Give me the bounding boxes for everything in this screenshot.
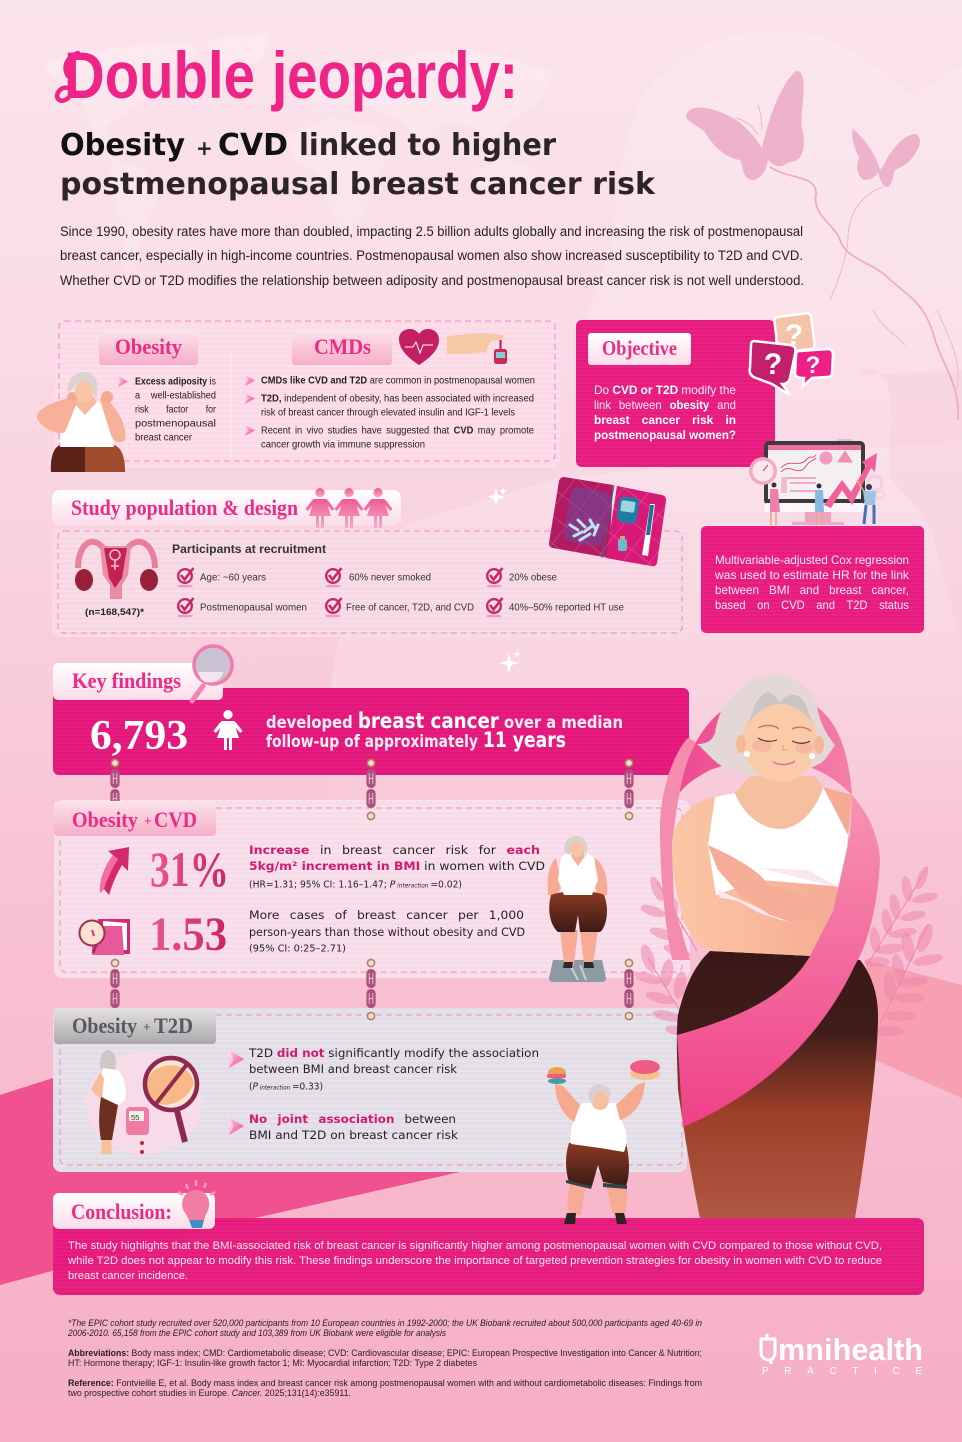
icon: question bubbles: ? (806, 352, 820, 379)
icon: light bulb (178, 1180, 215, 1228)
heading: key findings (53, 663, 223, 700)
heading: CMDs (292, 329, 392, 365)
heading: CMDs: CMDs (314, 334, 371, 359)
stat: 1.53: 1.53 (149, 908, 227, 961)
CVD text: increase: 5kg/m² increment in BMI in women with CVD (249, 859, 545, 873)
CVD text: more cases (249, 908, 525, 954)
subtitle: linked to higher (299, 128, 556, 163)
icon: rising arrow (100, 847, 129, 895)
icon: magnifying glass (192, 646, 232, 701)
CVD text: increase: (HR=1.31; 95% CI: 1.16–1.47; P interaction =0.02) (249, 880, 462, 890)
participant checklist: 20% obese (509, 572, 557, 584)
stat: 6,793: 6,793 (90, 713, 188, 759)
subtitle: CVD (218, 128, 288, 163)
heading: conclusion (53, 1193, 215, 1229)
panel: methods: was used to estimate HR for the link (714, 568, 910, 582)
participant checklist: Postmenopausal women (200, 602, 307, 614)
participant checklist: Free of cancer, T2D, and CVD (346, 602, 474, 614)
icon: question bubbles: ? (764, 348, 782, 381)
participants heading: Participants at recruitment (172, 544, 326, 556)
obesity text: Excess adiposity is (135, 376, 216, 388)
butterflies and stems (686, 71, 958, 420)
CVD text: increase: Increase in breast cancer risk for each (249, 843, 540, 857)
heading: Obesity: Obesity (115, 334, 182, 359)
obesity text (118, 376, 217, 444)
icon: heart (399, 329, 439, 365)
ribbon back loop (678, 707, 852, 795)
intro paragraph: Whether CVD or T2D modifies the relationship between adiposity and postmenopausal breast cancer risk is not well understood. (60, 273, 804, 288)
right ribbon and sash (677, 795, 880, 1127)
illustration: monitor and analysts (749, 440, 884, 525)
obesity text: a well-established (135, 390, 216, 402)
objective text: link between obesity and (594, 398, 736, 412)
neck (735, 776, 823, 829)
heading: obesity plus CVD: + (144, 813, 152, 828)
tank top (708, 787, 848, 895)
key finding text: follow-up of approximately 11 years (266, 728, 566, 752)
illustration: main woman with pink ribbon (660, 675, 880, 1218)
intro paragraph: Since 1990, obesity rates have more than doubled, impacting 2.5 billion adults globally and increasing the risk of postmenopausal (60, 224, 803, 239)
subtitle: postmenopausal breast cancer risk (60, 167, 656, 202)
objective text (594, 383, 736, 442)
panel: obesity and CMDs (37, 317, 560, 472)
panel: methods: based on CVD and T2D status (715, 598, 909, 612)
heading: key findings: Key findings (72, 668, 181, 693)
heading: study population and design: Study population & design (71, 495, 298, 520)
obesity text: breast cancer (135, 432, 193, 444)
icon: uterus (75, 542, 158, 599)
CVD text: more cases: (95% CI: 0:25–2.71) (249, 944, 346, 954)
title: Double (64, 38, 255, 112)
face (743, 704, 817, 782)
conclusion text (67, 1240, 882, 1282)
heading: Objective: Objective (602, 336, 677, 360)
footnotes: HT: Hormone therapy; IGF-1: Insulin-like growth factor 1; MI: Myocardial infarction; T2D: Type 2 diabetes (68, 1358, 477, 1369)
sample size: (n=168,547)* (85, 607, 145, 617)
torso and arms (672, 787, 865, 956)
stat: 31%: 31% (150, 841, 229, 897)
CMDs text: cancer growth via immune suppression (261, 440, 425, 450)
conclusion text: while T2D does not appear to modify this risk. These findings underscore the importance of targeted prevention strategies for obesity in women with CVD to reduce (67, 1255, 882, 1267)
icon: finger and glucose meter (447, 333, 507, 364)
panel: conclusion (53, 1180, 924, 1295)
T2D text: did not (229, 1046, 539, 1092)
illustration: woman holding burger and donut (547, 1060, 660, 1224)
heading: conclusion: Conclusion: (71, 1199, 172, 1224)
logo: Omnihealth Practice: PRACTICE (762, 1366, 922, 1377)
heading: obesity plus CVD: CVD (154, 807, 197, 832)
T2D text: did not: (P interaction =0.33) (249, 1082, 323, 1092)
panel: obesity plus T2D (53, 1008, 687, 1172)
icon: question bubbles (750, 313, 833, 395)
footnotes: 2006-2010. 65,158 from the EPIC cohort study and 103,389 from UK Biobank were eligible for analysis (67, 1328, 446, 1339)
panel: methods (701, 526, 924, 633)
heading: Obesity (99, 329, 198, 365)
conclusion text: The study highlights that the BMI-associated risk of breast cancer is significantly higher among postmenopausal women with CVD compared to those without CVD, (68, 1240, 882, 1252)
illustration: woman with thumbs up (37, 372, 126, 472)
footnotes: Reference: Fontvieille E, et al. Body mass index and breast cancer risk among postmenopausal women with and without cardiometabolic diseases: Findings from (68, 1378, 702, 1389)
intro paragraph: breast cancer, especially in high-income countries. Postmenopausal women also show increased susceptibility to T2D and CVD. (60, 248, 803, 263)
CMDs text: T2D, independent of obesity, has been associated with increased (261, 394, 534, 404)
intro paragraph (60, 224, 804, 288)
panel: methods: Multivariable-adjusted Cox regression (715, 553, 909, 567)
T2D text: no joint association: BMI and T2D on breast cancer risk (249, 1128, 458, 1142)
illustration: woman, breast and glucose meter (86, 1050, 202, 1154)
icon: folder with magnifier (80, 919, 130, 955)
footnotes: *The EPIC cohort study recruited over 520,000 participants from 10 European countries in 1992-2000; the UK Biobank recruited about 500,000 participants aged 40-69 in (68, 1318, 702, 1329)
footnotes: two prospective cohort studies in Europe. Cancer. 2025;131(14):e35911. (68, 1388, 351, 1399)
CVD text: more cases: person-years than those without obesity and CVD (249, 925, 525, 939)
heading: Objective (588, 333, 691, 365)
CMDs text: Recent in vivo studies have suggested that CVD may promote (261, 426, 534, 436)
CMDs text: risk of breast cancer through elevated insulin and IGF-1 levels (261, 408, 515, 418)
panel: methods: between BMI and breast cancer, (715, 583, 909, 597)
footnotes: Abbreviations: Body mass index; CMD: Cardiometabolic disease; CVD: Cardiovascular disease; EPIC: European Prospective Investigation into Cancer & Nutrition; (68, 1348, 702, 1359)
title (57, 38, 518, 112)
skirt (677, 951, 878, 1218)
subtitle (60, 128, 656, 202)
panel: key findings (53, 646, 689, 775)
CVD text: more cases: More cases of breast cancer per 1,000 (249, 908, 524, 922)
panel: obesity plus CVD (54, 800, 690, 978)
objective text: postmenopausal women? (594, 428, 736, 442)
participant checklist (177, 568, 624, 617)
participant checklist: 60% never smoked (349, 572, 431, 584)
heading: obesity plus CVD (54, 801, 216, 836)
subtitle: Obesity (60, 128, 185, 163)
participant checklist: 40%–50% reported HT use (509, 602, 624, 614)
T2D text: no joint association: No joint association between (249, 1112, 456, 1126)
illustration: woman on scale (548, 836, 607, 982)
objective text: Do CVD or T2D modify the (594, 383, 736, 397)
footnotes (67, 1318, 702, 1399)
participant checklist: Age: ~60 years (200, 572, 266, 584)
icon: woman (214, 710, 242, 750)
CVD text: increase (249, 843, 545, 890)
objective text: breast cancer risk in (594, 413, 736, 427)
chains (110, 759, 634, 1020)
panel: study population and design (52, 488, 688, 637)
heading: obesity plus T2D: T2D (154, 1013, 193, 1038)
illustration: medical kit (549, 477, 666, 566)
T2D text: did not: between BMI and breast cancer risk (249, 1062, 457, 1076)
obesity text: postmenopausal (135, 418, 216, 430)
CMDs text (245, 375, 535, 450)
crossed arm (708, 845, 840, 925)
heading: obesity plus CVD: Obesity (72, 807, 138, 832)
subtitle: + (196, 136, 213, 160)
heading: study population and design (52, 488, 401, 528)
heading: obesity plus T2D (54, 1008, 216, 1044)
icon: question bubbles: ? (785, 319, 803, 352)
logo: Omnihealth Practice (761, 1332, 923, 1377)
conclusion text: breast cancer incidence. (68, 1270, 188, 1282)
obesity text: risk factor for (135, 404, 217, 416)
panel: objective (576, 320, 775, 467)
sparkles (487, 487, 521, 674)
logo: Omnihealth Practice: mnihealth (778, 1332, 923, 1367)
T2D text: no joint association (229, 1112, 458, 1142)
heading: obesity plus T2D: Obesity (72, 1013, 137, 1038)
ribbon left side (660, 738, 696, 960)
key finding text (266, 709, 623, 752)
CMDs text: CMDs like CVD and T2D are common in postmenopausal women (261, 376, 535, 386)
T2D text: did not: T2D did not significantly modify the association (248, 1046, 539, 1060)
world map watermark (42, 32, 555, 270)
title: jeopardy: (270, 38, 518, 112)
laurel leaves (633, 865, 944, 1056)
key finding text: developed breast cancer over a median (266, 709, 623, 733)
hair (697, 675, 835, 775)
heading: obesity plus T2D: + (143, 1019, 151, 1034)
illustration: woman, breast and glucose meter: 55 (131, 1113, 139, 1122)
